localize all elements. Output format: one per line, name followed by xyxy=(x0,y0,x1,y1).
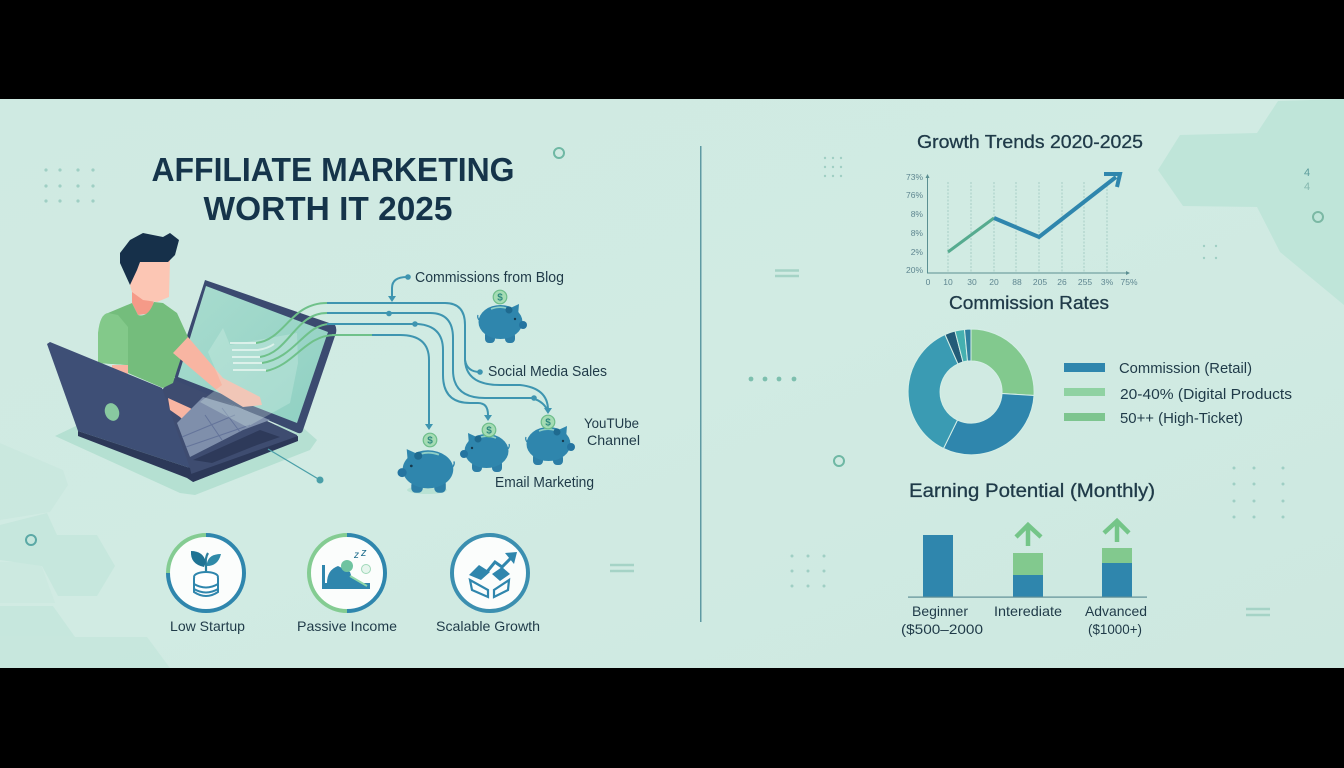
decorative hexagons right xyxy=(1158,99,1344,305)
icon: coins and sprout xyxy=(191,551,221,596)
shirt xyxy=(98,302,188,388)
face xyxy=(130,260,170,302)
label: Low Startup: Low Startup xyxy=(170,618,245,634)
line chart: growth trends: 255 xyxy=(1078,277,1092,287)
laptop shadow xyxy=(55,425,317,495)
arrow: intermediate xyxy=(1016,525,1041,546)
line chart: growth trends: 8% xyxy=(911,228,923,238)
branch to Commissions xyxy=(392,277,407,297)
laptop lid back xyxy=(47,342,190,468)
keyboard xyxy=(177,397,270,457)
heading: commission rates: Commission Rates xyxy=(949,293,1109,313)
black top band xyxy=(0,0,1344,99)
legend: commission rates: 20-40% (Digital Products xyxy=(1120,387,1292,403)
laptop lid lower edge xyxy=(78,431,193,482)
keyboard grid xyxy=(182,408,250,447)
icon: box with arrow xyxy=(469,552,517,597)
arm near xyxy=(112,365,128,375)
divider line xyxy=(700,146,702,622)
line chart: growth trends: 76% xyxy=(906,190,923,200)
hand near xyxy=(168,398,210,428)
title: WORTH IT 2025 xyxy=(204,190,452,227)
line chart: growth trends: 26 xyxy=(1057,277,1067,287)
line chart: growth trends: 20% xyxy=(906,265,923,275)
branch to Social Media Sales xyxy=(465,360,480,372)
arm far xyxy=(173,337,262,407)
heading: earning potential: Earning Potential (Monthly) xyxy=(909,481,1155,502)
hair xyxy=(120,233,179,285)
benefit: low startup xyxy=(168,535,244,611)
green connector curves xyxy=(256,303,327,343)
line to Social Media Sales and YouTube xyxy=(327,303,548,410)
keyboard lower keys xyxy=(193,430,280,463)
title: AFFILIATE MARKETING xyxy=(152,151,514,188)
label: YouTube Channel: Channel xyxy=(587,432,640,448)
label: Social Media Sales: Social Media Sales xyxy=(488,364,607,380)
background panel xyxy=(0,99,1344,668)
benefit: scalable growth xyxy=(452,535,528,611)
line to YouTube xyxy=(327,313,548,412)
bar chart: earning potential xyxy=(908,521,1147,598)
legend: commission rates: 50++ (High-Ticket) xyxy=(1120,411,1243,427)
laptop base front edge xyxy=(191,436,298,482)
piggy bank: email xyxy=(460,423,509,472)
label: Email Marketing: Email Marketing xyxy=(495,475,594,491)
line chart: growth trends: 205 xyxy=(1033,277,1047,287)
label: Passive Income: Passive Income xyxy=(297,618,397,634)
label: Scalable Growth: Scalable Growth xyxy=(436,618,540,634)
decorative dots and rings: 4 xyxy=(1304,167,1310,179)
white connector curves xyxy=(230,343,274,370)
laptop pointer line xyxy=(268,449,320,480)
decorative dots and rings: 4 xyxy=(1304,181,1310,193)
icon: resting person xyxy=(322,547,370,589)
line chart: growth trends: 75% xyxy=(1120,277,1138,287)
bar labels: ($1000+) xyxy=(1088,621,1142,637)
bar labels: Advanced xyxy=(1085,603,1147,619)
laptop base xyxy=(162,377,298,482)
line chart: growth trends: 20 xyxy=(989,277,999,287)
line chart: growth trends: 3% xyxy=(1101,277,1114,287)
laptop pointer dot xyxy=(316,476,324,484)
neck xyxy=(132,290,154,315)
decorative hexagons left xyxy=(0,443,170,668)
benefit: passive income xyxy=(309,535,385,611)
line chart: growth trends: 8% xyxy=(911,209,923,219)
line chart: growth trends xyxy=(906,172,1138,287)
bar labels xyxy=(901,603,1147,637)
title xyxy=(152,151,514,227)
line to left pig xyxy=(335,335,429,425)
line to middle pig xyxy=(327,324,488,415)
heading: growth trends: Growth Trends 2020-2025 xyxy=(917,131,1143,152)
person xyxy=(98,233,262,428)
holographic overlay xyxy=(200,328,298,427)
laptop logo xyxy=(102,401,122,423)
laptop screen xyxy=(178,286,328,423)
black bottom band xyxy=(0,668,1344,768)
shirt sleeve xyxy=(98,313,128,365)
icon: resting person: z xyxy=(353,550,359,561)
illustration: person at laptop xyxy=(47,233,336,495)
legend: commission rates: Commission (Retail) xyxy=(1119,361,1252,377)
line chart: growth trends: 10 xyxy=(943,277,953,287)
label: YouTube Channel: YouTUbe xyxy=(584,415,639,431)
piggy bank: blog xyxy=(478,290,527,343)
legend: commission rates xyxy=(1064,361,1292,427)
bar labels: Interediate xyxy=(994,603,1062,619)
line chart: growth trends: 2% xyxy=(911,247,923,257)
flow lines xyxy=(230,277,548,425)
bar labels: ($500–2000 xyxy=(901,621,983,637)
flow line nodes and arrowheads xyxy=(386,274,552,430)
piggy bank: YouTube xyxy=(526,415,575,465)
bar labels: Beginner xyxy=(912,603,968,619)
icon: resting person: z xyxy=(360,547,367,559)
line chart: growth trends: 30 xyxy=(967,277,977,287)
line chart: growth trends: 88 xyxy=(1012,277,1022,287)
label: Commissions from Blog: Commissions from Blog xyxy=(415,270,564,286)
line chart: growth trends: 0 xyxy=(926,277,931,287)
piggy bank: left xyxy=(398,433,454,494)
arrow: advanced xyxy=(1104,521,1129,542)
label: YouTube Channel xyxy=(584,415,640,448)
line chart: growth trends: 73% xyxy=(906,172,923,182)
laptop screen bezel xyxy=(174,280,336,433)
donut chart: commission rates xyxy=(908,329,1034,455)
decorative dots and rings xyxy=(26,148,1323,615)
